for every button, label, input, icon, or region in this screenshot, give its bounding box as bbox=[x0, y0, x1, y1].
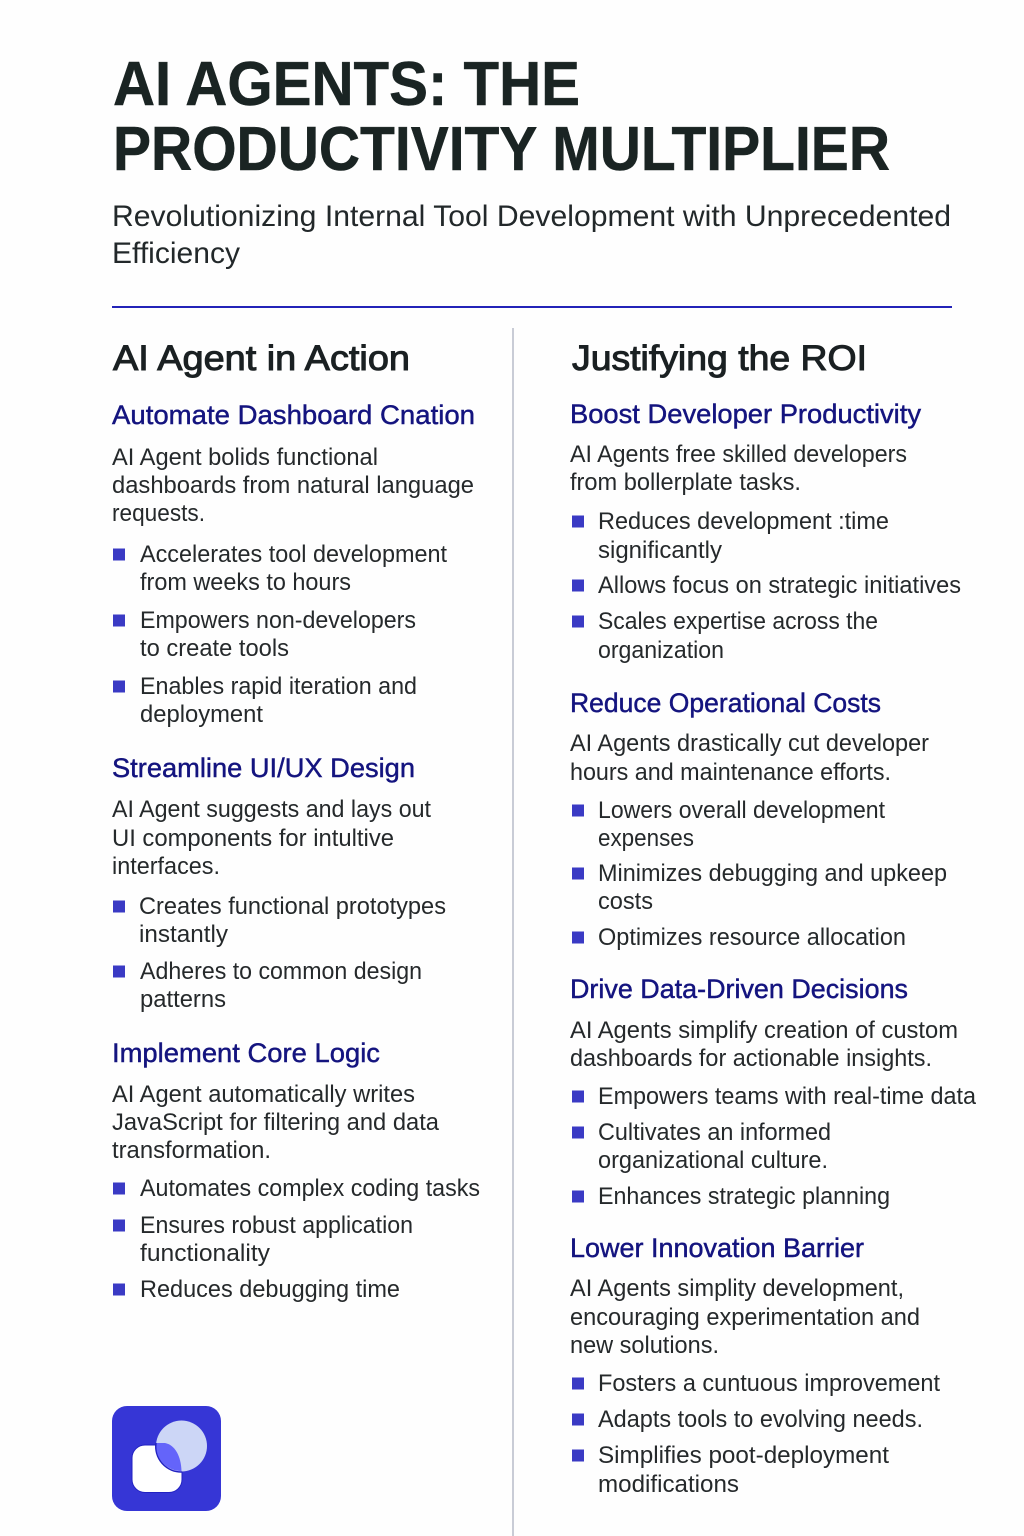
description: JavaScript for filtering and data bbox=[112, 1109, 440, 1136]
bullet: Adapts tools to evolving needs. bbox=[598, 1406, 923, 1433]
description bbox=[570, 441, 907, 496]
description: dashboards for actionable insights. bbox=[570, 1045, 932, 1072]
bullet: Allows focus on strategic initiatives bbox=[598, 572, 961, 599]
section: Streamline UI/UX Design bbox=[112, 753, 446, 1013]
bullet: deployment bbox=[140, 701, 263, 728]
bullet: Ensures robust application bbox=[140, 1212, 413, 1239]
bullet: Fosters a cuntuous improvement bbox=[598, 1370, 940, 1397]
description: AI Agents drastically cut developer bbox=[570, 730, 929, 757]
description: hours and maintenance efforts. bbox=[570, 759, 891, 786]
description: AI Agent suggests and lays out bbox=[112, 796, 431, 823]
description bbox=[112, 444, 474, 527]
title: AI AGENTS: THE bbox=[113, 50, 580, 119]
description: transformation. bbox=[112, 1137, 271, 1164]
description: AI Agents simplity development, bbox=[570, 1275, 904, 1302]
bullet bbox=[113, 607, 416, 662]
title: PRODUCTIVITY MULTIPLIER bbox=[113, 115, 890, 184]
bullet: significantly bbox=[598, 537, 722, 564]
bullet bbox=[572, 860, 947, 915]
section heading: Boost Developer Productivity bbox=[570, 399, 921, 429]
column heading: AI Agent in Action bbox=[113, 339, 410, 378]
description: requests. bbox=[112, 500, 205, 527]
bullet bbox=[113, 893, 446, 948]
section: Drive Data-Driven Decisions bbox=[570, 974, 977, 1210]
section heading: Lower Innovation Barrier bbox=[570, 1233, 864, 1263]
bullet bbox=[572, 1442, 889, 1498]
description: interfaces. bbox=[112, 853, 220, 880]
bullet bbox=[113, 541, 447, 596]
bullet: to create tools bbox=[140, 635, 289, 662]
bullet: Cultivates an informed bbox=[598, 1119, 831, 1146]
bullet bbox=[113, 673, 417, 728]
panel: AI Agent in Action bbox=[112, 339, 480, 1303]
bullet bbox=[572, 508, 889, 564]
icon: overlapping shapes logo bbox=[112, 1406, 221, 1511]
bullet: Minimizes debugging and upkeep bbox=[598, 860, 947, 887]
bullet: Accelerates tool development bbox=[140, 541, 447, 568]
bullet: Automates complex coding tasks bbox=[140, 1175, 480, 1202]
bullet: Empowers non-developers bbox=[140, 607, 416, 634]
bullet: modifications bbox=[598, 1471, 739, 1498]
bullet: Optimizes resource allocation bbox=[598, 924, 906, 951]
bullet: Reduces debugging time bbox=[140, 1276, 400, 1303]
subtitle: Efficiency bbox=[112, 237, 240, 270]
description bbox=[570, 1017, 958, 1072]
description bbox=[570, 1275, 920, 1359]
bullet bbox=[572, 1119, 831, 1174]
bullet: Reduces development :time bbox=[598, 508, 889, 535]
bullet: organization bbox=[598, 637, 724, 664]
bullet: Empowers teams with real-time data bbox=[598, 1083, 977, 1110]
bullet: Simplifies poot-deployment bbox=[598, 1442, 889, 1469]
bullet: instantly bbox=[139, 921, 228, 948]
column heading: Justifying the ROI bbox=[572, 339, 867, 378]
section: Automate Dashboard Creation bbox=[112, 400, 475, 728]
panel: Justifying the ROI bbox=[570, 339, 977, 1498]
description: new solutions. bbox=[570, 1332, 719, 1359]
bullet: functionality bbox=[140, 1240, 270, 1267]
section heading: Implement Core Logic bbox=[112, 1038, 380, 1068]
description: UI components for intultive bbox=[112, 825, 394, 852]
section heading: Automate Dashboard Cnation bbox=[112, 400, 475, 430]
bullet: Scales expertise across the bbox=[598, 608, 878, 635]
description: AI Agents simplify creation of custom bbox=[570, 1017, 958, 1044]
section heading: Streamline UI/UX Design bbox=[112, 753, 415, 783]
section: Boost Developer Productivity bbox=[570, 399, 961, 664]
bullet bbox=[572, 797, 885, 852]
bullet: Enables rapid iteration and bbox=[140, 673, 417, 700]
section: Implement Core Logic bbox=[112, 1038, 480, 1303]
bullet: Lowers overall development bbox=[598, 797, 885, 824]
section heading: Reduce Operational Costs bbox=[570, 688, 881, 718]
description: AI Agents free skilled developers bbox=[570, 441, 907, 468]
bullet: Adheres to common design bbox=[140, 958, 422, 985]
header bbox=[112, 50, 951, 270]
section: Lower Innovation Barrier bbox=[570, 1233, 940, 1498]
bullet: from weeks to hours bbox=[140, 569, 351, 596]
subtitle: Revolutionizing Internal Tool Development with Unprecedented bbox=[112, 200, 951, 233]
description: dashboards from natural language bbox=[112, 472, 474, 499]
bullet: organizational culture. bbox=[598, 1147, 828, 1174]
bullet: expenses bbox=[598, 825, 694, 852]
section heading: Drive Data-Driven Decisions bbox=[570, 974, 908, 1004]
bullet: Creates functional prototypes bbox=[139, 893, 446, 920]
bullet: Enhances strategic planning bbox=[598, 1183, 890, 1210]
bullet bbox=[113, 1212, 413, 1267]
description bbox=[112, 796, 431, 880]
bullet: costs bbox=[598, 888, 653, 915]
description: AI Agent bolids functional bbox=[112, 444, 378, 471]
bullet bbox=[572, 608, 878, 664]
description bbox=[570, 730, 929, 786]
description bbox=[112, 1081, 440, 1164]
description: encouraging experimentation and bbox=[570, 1304, 920, 1331]
title bbox=[113, 50, 890, 184]
subtitle bbox=[112, 200, 951, 270]
bullet: patterns bbox=[140, 986, 226, 1013]
description: from bollerplate tasks. bbox=[570, 469, 801, 496]
bullet bbox=[113, 958, 422, 1013]
section: Reduce Operational Costs bbox=[570, 688, 947, 951]
description: AI Agent automatically writes bbox=[112, 1081, 415, 1108]
